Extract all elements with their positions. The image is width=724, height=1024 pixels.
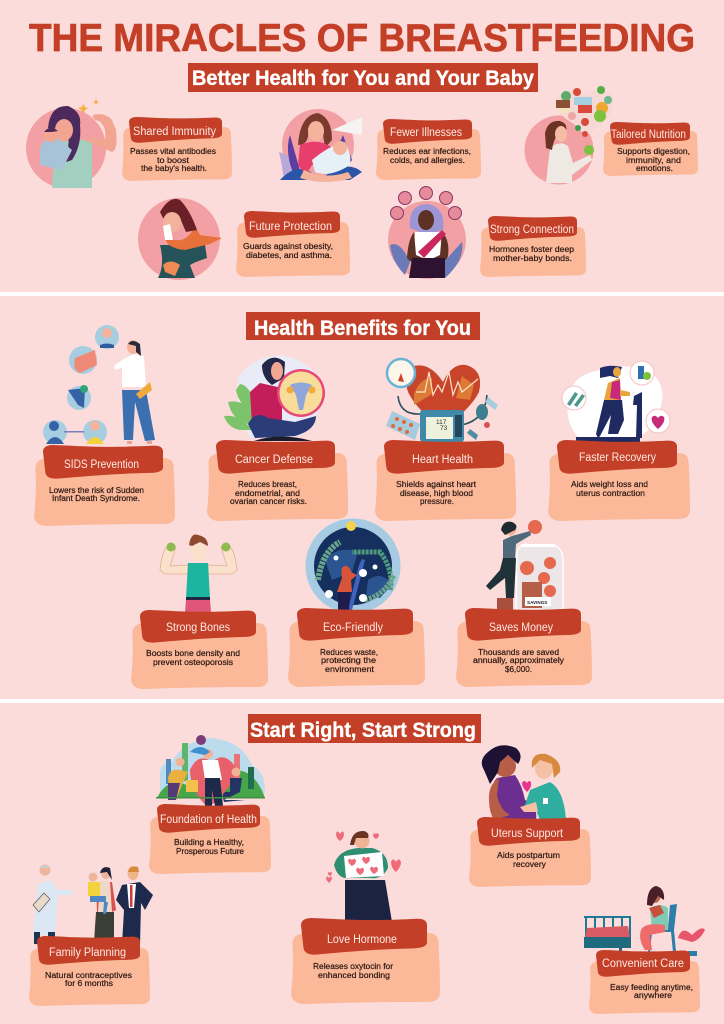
card body (288, 621, 425, 687)
illustration: doctor and prevention icons (43, 325, 155, 444)
card ribbon (596, 950, 690, 977)
card text (610, 983, 693, 1000)
card text: immunity, and (626, 156, 681, 165)
section heading: Start Right: Start Right, Start Strong (250, 719, 476, 742)
card: Convenient Care (584, 886, 705, 1014)
card text: colds, and allergies. (390, 156, 465, 165)
illustration: woman on treadmill (562, 361, 670, 442)
card body (456, 621, 592, 687)
card title: Uterus Support (491, 828, 564, 840)
card body (548, 453, 690, 521)
card title: Faster Recovery (579, 452, 656, 464)
card text (396, 480, 477, 506)
card text: protecting the (321, 656, 377, 665)
card body (149, 816, 271, 874)
card: SIDS Prevention (34, 325, 175, 526)
card text: environment (325, 665, 375, 674)
card: Future Protection (138, 198, 350, 280)
card: Uterus Support (469, 745, 591, 887)
card text: prevent osteoporosis (153, 658, 233, 667)
illustration: man adding coins to savings jar: SAVINGS (527, 600, 547, 605)
card text: Lowers the risk of Sudden (49, 486, 144, 495)
card: Eco-Friendly (288, 518, 425, 687)
card ribbon (129, 117, 222, 143)
card ribbon (384, 440, 504, 474)
card title: Family Planning (49, 947, 126, 959)
card text: Hormones foster deep (489, 245, 575, 254)
illustration: seated woman with uterus disc (224, 355, 325, 441)
card body (29, 948, 150, 1006)
illustration: mother with baby flexing (26, 99, 116, 188)
card text: Aids weight loss and (571, 480, 648, 489)
card text: the baby's health. (141, 164, 207, 173)
illustration: heart with blood pressure monitor: 117 (436, 419, 447, 426)
food heart (555, 86, 614, 137)
card: Strong Connection (388, 186, 586, 279)
card ribbon (465, 608, 581, 641)
card title: Saves Money (489, 622, 553, 634)
card body (207, 453, 348, 521)
card title: Strong Connection (490, 224, 574, 236)
illustration: woman holding syringe with hormone icons (388, 186, 466, 279)
card text: Prosperous Future (176, 847, 245, 856)
card: Shared Immunity (26, 99, 232, 188)
card text: Reduces waste, (320, 648, 378, 657)
card body (375, 453, 516, 521)
card text: disease, high blood (400, 489, 473, 498)
card text (174, 838, 245, 856)
card text (497, 851, 560, 869)
card text: Easy feeding anytime, (610, 983, 693, 992)
card text: recovery (513, 860, 546, 869)
card title: Convenient Care (602, 958, 684, 970)
card: Saves Money (456, 520, 592, 687)
card text: to boost (157, 156, 190, 165)
card text: anywhere (634, 991, 673, 1000)
card body (376, 129, 481, 180)
card: Heart Health (375, 359, 516, 521)
card: Faster Recovery (548, 361, 690, 521)
card title: Tailored Nutrition (611, 129, 686, 141)
card: Strong Bones (131, 534, 268, 689)
card body (480, 227, 586, 277)
title: THE MIRACLES OF BREASTFEEDING (29, 17, 695, 60)
card text (617, 147, 690, 173)
card title: Shared Immunity (133, 126, 216, 138)
card text (313, 962, 393, 980)
illustration: heart with blood pressure monitor: 73 (440, 425, 448, 432)
illustration: mother and baby with doctor (279, 109, 362, 182)
illustration: nutritionist with food heart (524, 86, 614, 184)
card ribbon (157, 804, 260, 833)
card text: Natural contraceptives (45, 971, 132, 980)
card ribbon (244, 211, 340, 238)
card text (45, 971, 132, 988)
card text: Releases oxytocin for (313, 962, 393, 971)
card: Foundation of Health (149, 735, 271, 874)
card text (243, 242, 333, 260)
card ribbon (477, 817, 580, 846)
card text: Aids postpartum (497, 851, 560, 860)
card: Family Planning (29, 864, 153, 1006)
card text (489, 245, 575, 263)
card ribbon (610, 122, 690, 145)
card body (34, 458, 175, 526)
card ribbon (297, 608, 413, 641)
section heading: Health Benefits: Health Benefits for You (254, 317, 471, 340)
card body (131, 623, 268, 689)
section heading: Better Health: Better Health for You and Your Baby (192, 67, 534, 90)
card text (383, 147, 471, 165)
card text: $6,000. (505, 665, 532, 674)
card title: Strong Bones (166, 622, 230, 634)
card: Fewer Illnesses (279, 109, 481, 182)
card ribbon (140, 610, 256, 643)
card: Tailored Nutrition (524, 86, 698, 184)
illustration: woman sneezing with scarf (138, 198, 222, 280)
illustration: heart with blood pressure monitor (386, 359, 498, 442)
card body (291, 933, 440, 1004)
illustration: people building a heart (156, 735, 265, 808)
card text: Reduces ear infections, (383, 147, 471, 156)
illustration: globe with woman on ladder (306, 518, 400, 614)
card: Love Hormone (291, 831, 440, 1004)
card ribbon (557, 440, 677, 474)
card text: ovarian cancer risks. (230, 497, 307, 506)
illustration: man adding coins to savings jar (486, 520, 563, 610)
card ribbon (301, 918, 427, 955)
card text: Shields against heart (396, 480, 477, 489)
card text (146, 649, 240, 667)
card text (49, 486, 144, 503)
card title: Future Protection (249, 221, 332, 233)
card body (589, 961, 700, 1014)
card text: annually, approximately (473, 656, 564, 665)
card body (603, 131, 698, 176)
card text: Passes vital antibodies (130, 147, 216, 156)
card title: Fewer Illnesses (390, 127, 462, 139)
card text: Building a Healthy, (174, 838, 244, 847)
card title: Foundation of Health (160, 814, 257, 826)
card: Cancer Defense (207, 355, 348, 521)
illustration: doctor with family (33, 864, 153, 945)
illustration: person holding hearts (326, 831, 401, 922)
card ribbon (488, 216, 577, 241)
card body (236, 222, 350, 277)
card ribbon (383, 119, 472, 144)
card text: Reduces breast, (238, 480, 297, 489)
card text: enhanced bonding (318, 971, 390, 980)
card ribbon (216, 440, 335, 474)
card ribbon (43, 445, 163, 479)
card text: Thousands are saved (478, 648, 559, 657)
card text: Infant Death Syndrome. (52, 494, 140, 503)
card title: Cancer Defense (235, 454, 313, 466)
card body (469, 829, 591, 887)
illustration: mother feeding near crib (584, 886, 705, 956)
card text: uterus contraction (576, 489, 645, 498)
card title: Eco-Friendly (323, 622, 383, 634)
card text: for 6 months (65, 979, 113, 988)
card text: mother-baby bonds. (493, 254, 572, 263)
card text: endometrial, and (235, 489, 300, 498)
card text (130, 147, 216, 173)
card ribbon (37, 936, 140, 965)
card text (230, 480, 307, 506)
card text: Boosts bone density and (146, 649, 240, 658)
card text: emotions. (636, 164, 673, 173)
card title: Love Hormone (327, 934, 397, 946)
card text: Guards against obesity, (243, 242, 333, 251)
card title: Heart Health (412, 454, 473, 466)
card title: SIDS Prevention (64, 459, 139, 471)
card text (571, 480, 648, 498)
card body (122, 127, 232, 181)
card text (320, 648, 378, 674)
card text (473, 648, 564, 674)
card text: Supports digestion, (617, 147, 690, 156)
card text: pressure. (420, 497, 454, 506)
illustration: pregnant woman with nurse (482, 745, 566, 820)
illustration: woman flexing with dumbbells (160, 534, 237, 612)
card text: diabetes, and asthma. (246, 251, 332, 260)
